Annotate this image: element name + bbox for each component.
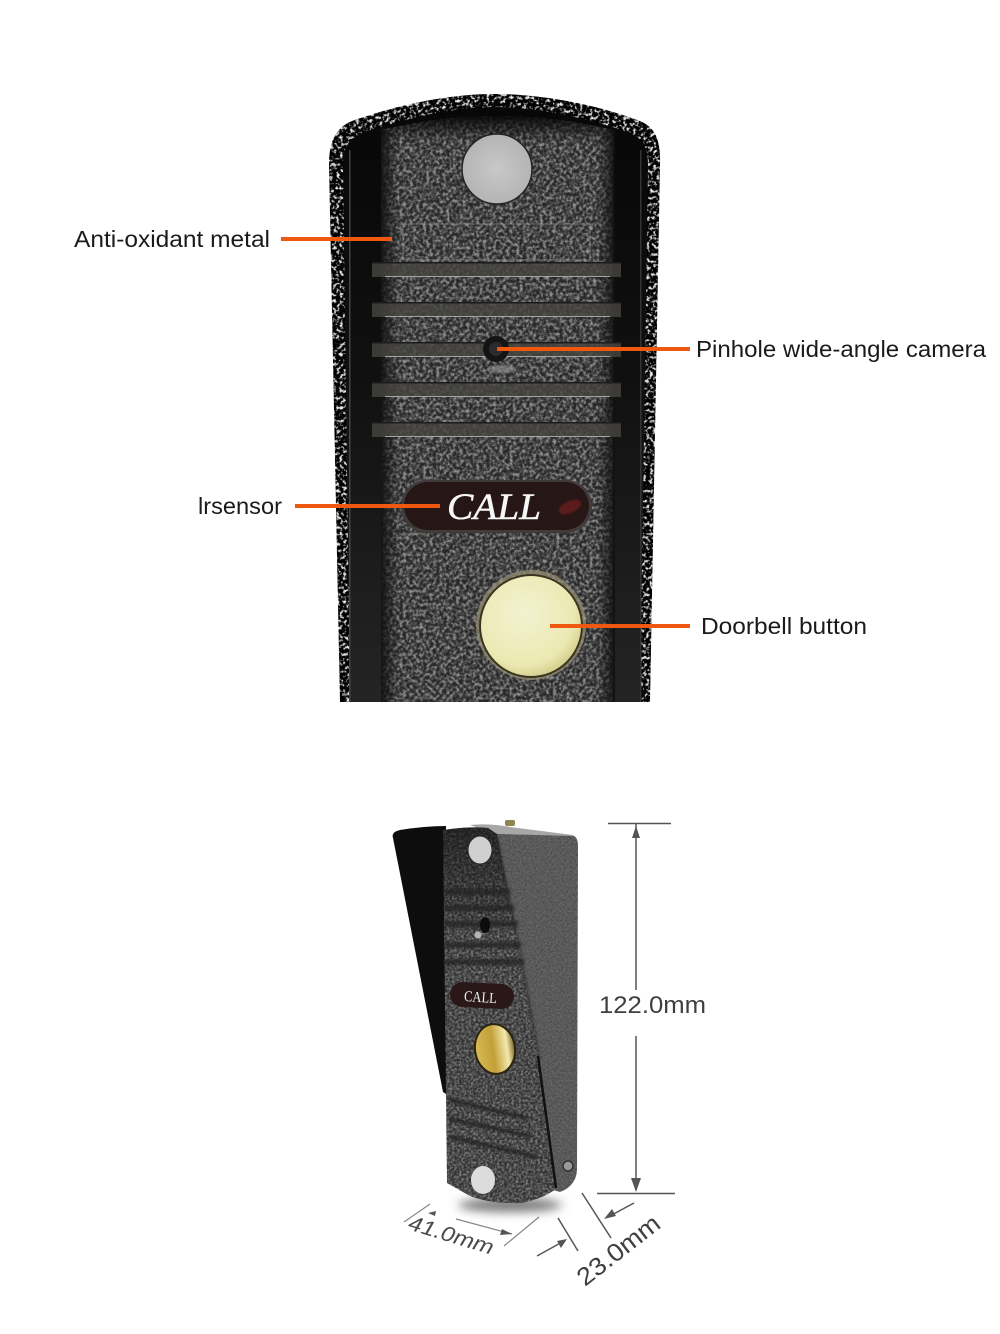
callout: Anti-oxidant metal [74,226,392,252]
top screw cover [468,836,492,864]
side panel [497,834,578,1192]
callout: Doorbell button: Doorbell button [701,613,867,639]
CALL badge: CALL [463,989,497,1007]
callout: Irsensor: lrsensor [198,493,282,519]
top screw cover [462,134,532,204]
front plate [443,827,557,1203]
top light edge [470,824,578,842]
callout: Pinhole wide-angle camera: Pinhole wide-angle camera [696,336,987,362]
callout: Irsensor [198,493,440,519]
plate edge dark line [538,1056,556,1188]
gold button [472,1021,518,1077]
CALL badge [401,480,592,533]
CALL badge [449,981,515,1010]
bottom screw cover [471,1166,495,1194]
callout: Pinhole wide-angle camera [497,336,987,362]
callout: Doorbell button [550,613,867,639]
dimension: depth 23.0mm [537,1193,666,1292]
pinhole camera [474,917,490,938]
speckled metal rim [329,94,660,702]
pinhole camera [483,336,516,373]
plate top shading [443,827,518,940]
panel: angled view of door unit [393,820,578,1212]
black inner hood [343,107,648,702]
dimension: height 122.0mm [597,824,706,1194]
upper slots [444,889,524,965]
ground shadow [458,1198,562,1212]
dimension: depth 23.0mm: 23.0mm [571,1209,666,1292]
top screw [505,820,515,826]
side screw [563,1161,573,1171]
dimension: width 41.0mm [404,1204,539,1260]
callout: Anti-oxidant metal: Anti-oxidant metal [74,226,270,252]
embossed rectangle [403,224,590,260]
dimension: height 122.0mm: 122.0mm [599,992,706,1019]
panel: front view of door unit [329,94,660,702]
black hood wing [393,826,446,1094]
plate edge shadow [497,835,540,1060]
doorbell button [476,570,586,680]
lower slots [449,1100,537,1157]
faceplate edge shading [349,116,642,702]
speaker slots [372,262,621,437]
metal faceplate [381,116,613,702]
dimension: width 41.0mm: 41.0mm [406,1212,496,1260]
CALL badge: CALL [447,487,541,528]
